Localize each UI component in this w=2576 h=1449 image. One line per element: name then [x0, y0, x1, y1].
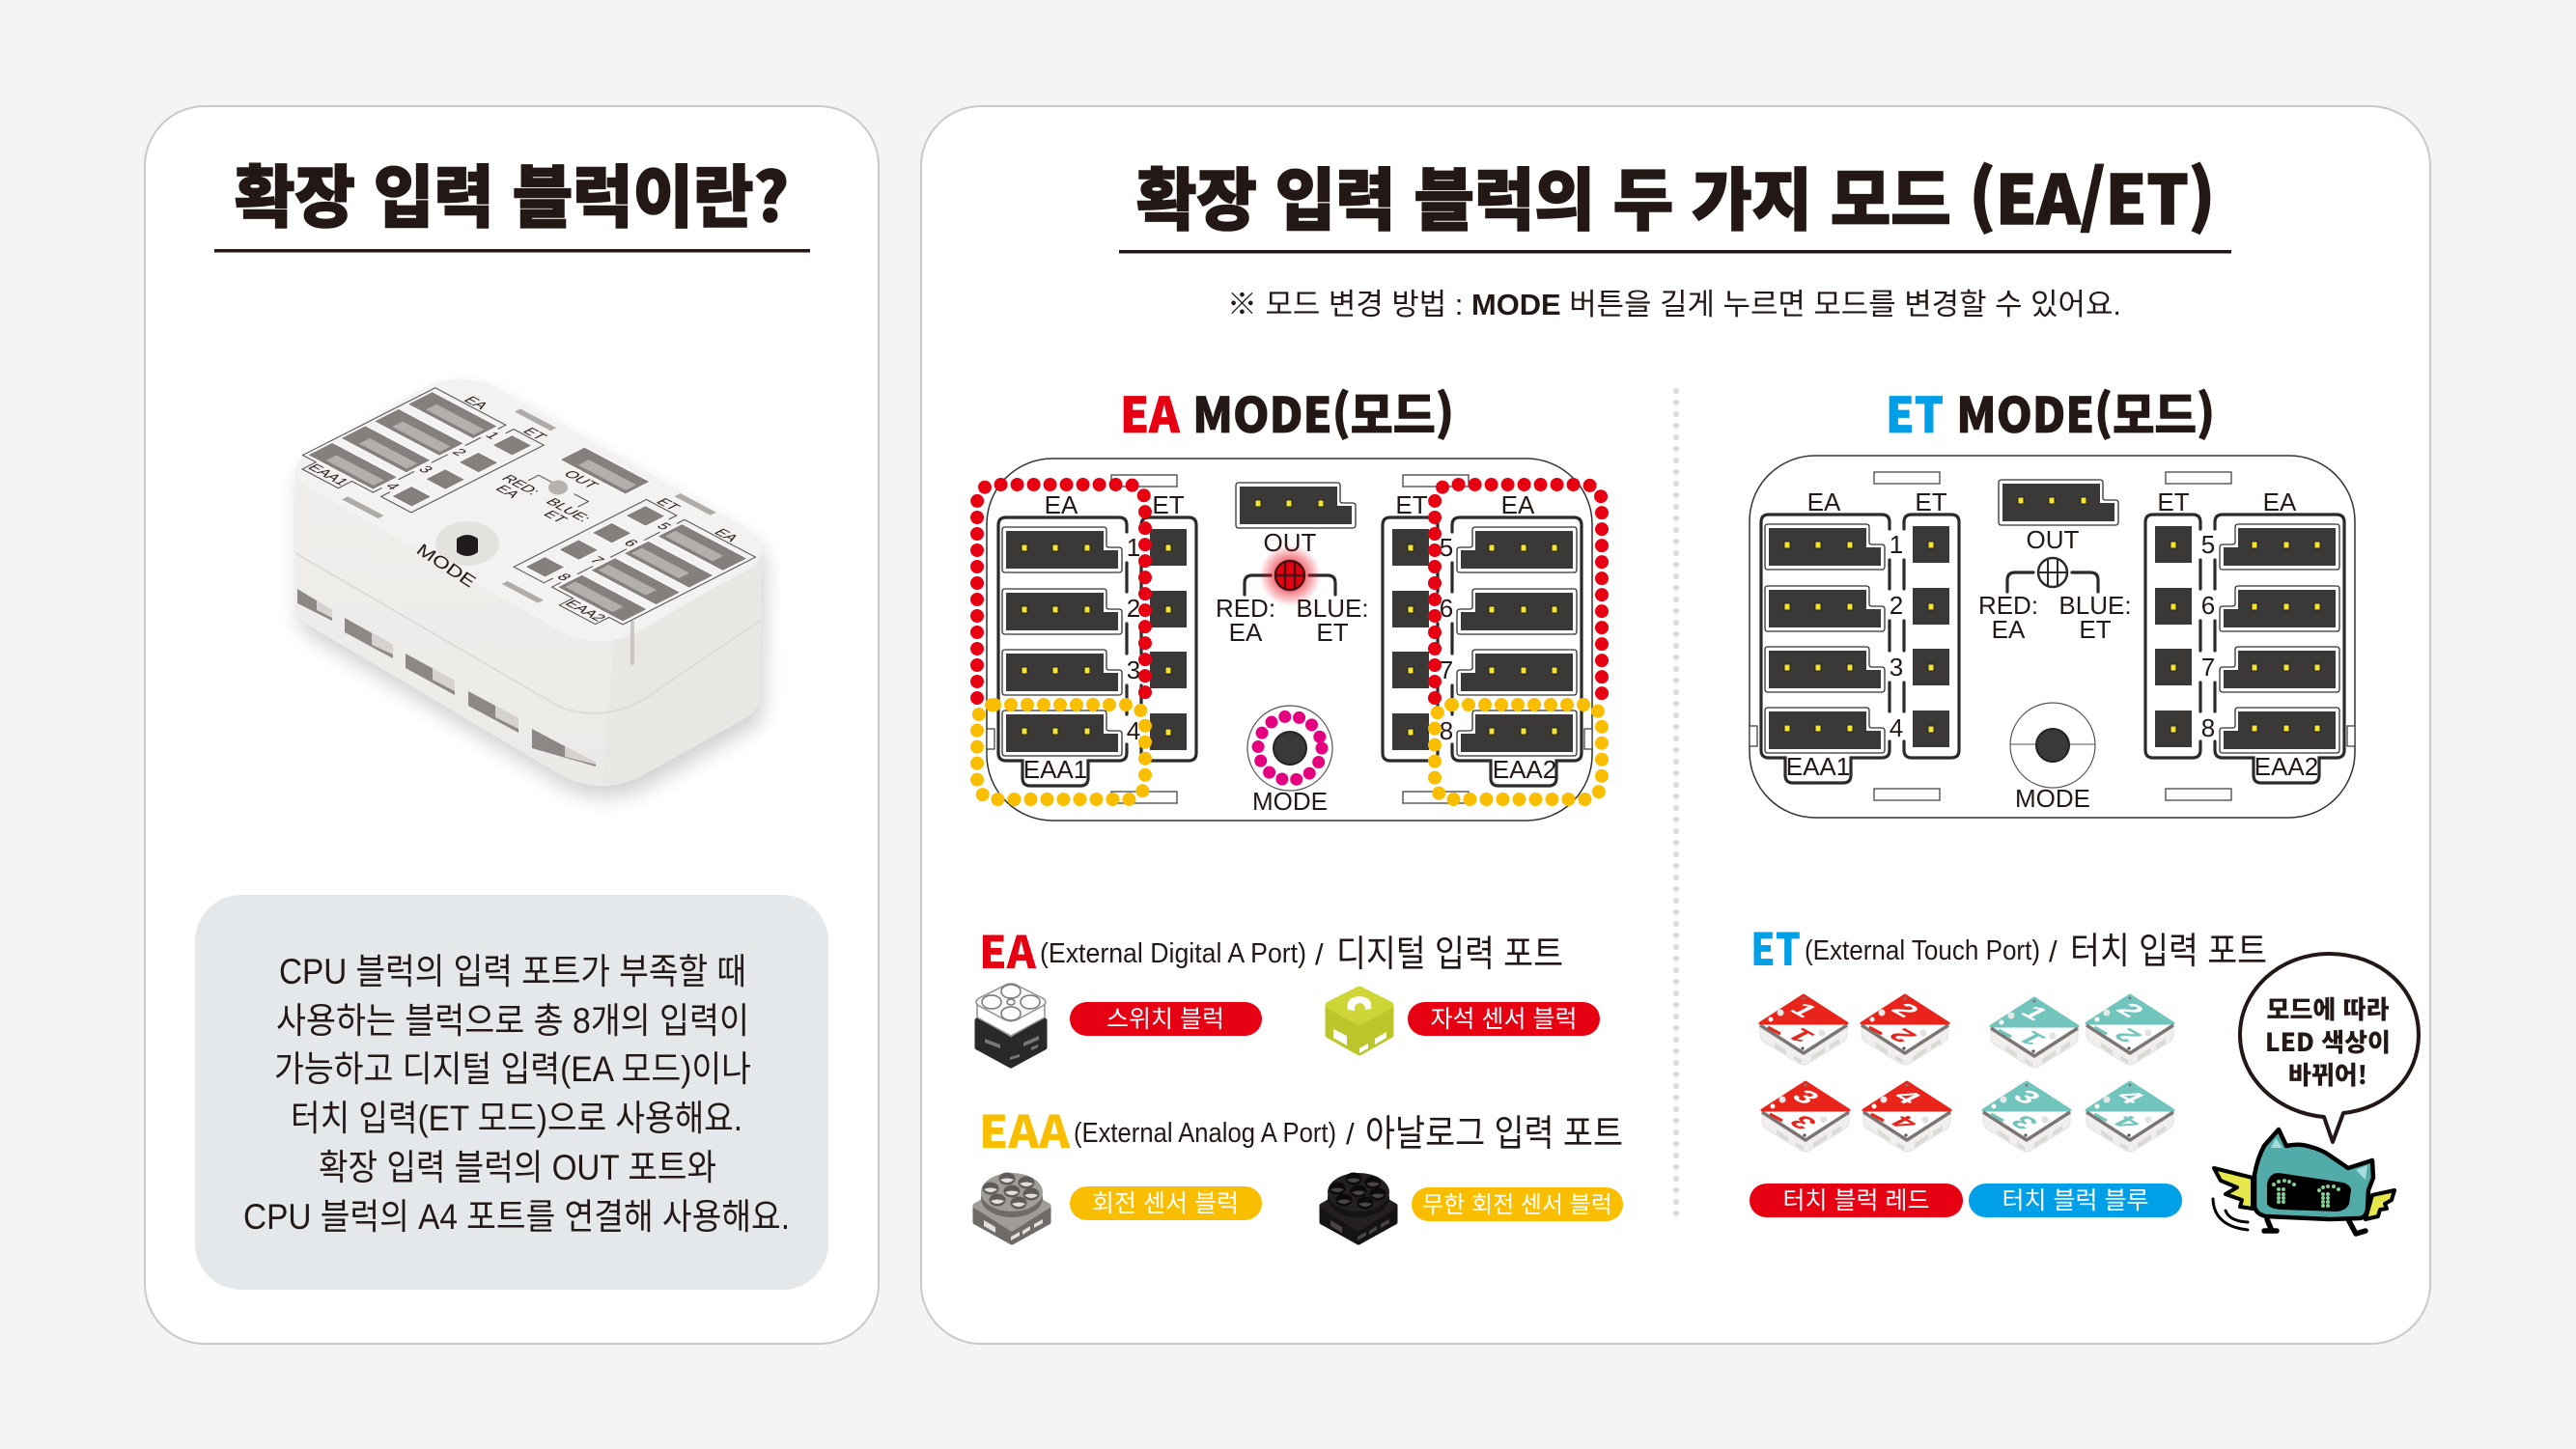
label: slash: / [2049, 934, 2058, 968]
panel: what is the extended input block [145, 106, 879, 1344]
diagram: EA mode board: EA [1501, 490, 1535, 519]
icon: blue touch block 3: 3 [2003, 1111, 2045, 1133]
diagram: ET mode board: RED: [1978, 591, 2038, 620]
diagram: ET mode board: 1 [1890, 530, 1903, 559]
pill: magnetic sensor block [1408, 1002, 1600, 1036]
label: digital input port: 디지털 입력 포트 [1336, 934, 1563, 975]
illustration: extended input block module: BLUE: [542, 496, 595, 524]
icon: red touch block 2: 2 [1885, 999, 1926, 1021]
diagram: ET mode board [1750, 456, 2355, 818]
label: slash: / [1315, 937, 1324, 971]
illustration: extended input block module: ET [518, 426, 550, 442]
icon: red touch block 4: 4 [1887, 1086, 1928, 1108]
icon: mode button with magenta dotted ring [1247, 706, 1332, 791]
description text: 터치 입력(ET 모드)으로 사용해요. [291, 1099, 742, 1138]
illustration: extended input block module [280, 376, 778, 797]
icon: red touch block 1: 1 [1780, 1024, 1822, 1046]
illustration: extended input block module: OUT [559, 468, 602, 491]
diagram: EA mode board: 4 [1127, 716, 1140, 745]
highlight: red dotted EA zones [977, 485, 1602, 698]
heading: ET mode: ET MODE(모드) [1886, 377, 2215, 447]
icon: blue touch block 3 [1983, 1082, 2070, 1152]
icon: blue touch block 4: 4 [2107, 1111, 2148, 1133]
label: analog input port: 아날로그 입력 포트 [1365, 1114, 1623, 1155]
icon: blue touch block 2: 2 [2110, 999, 2151, 1021]
label: EAA: EAA [979, 1098, 1071, 1161]
illustration: extended input block module: 4 [381, 481, 404, 492]
diagram: ET mode board: 6 [2201, 591, 2215, 620]
diagram: EA mode board: MODE [1252, 787, 1328, 816]
description text: 확장 입력 블럭의 OUT 포트와 [319, 1148, 716, 1187]
heading: EA mode: EA MODE(모드) [1120, 377, 1454, 447]
diagram: EA mode board: RED: [1216, 594, 1275, 623]
diagram: ET mode board: ET [2157, 488, 2190, 516]
diagram: ET mode board: EAA1 [1786, 752, 1850, 781]
highlight: yellow dotted EAA zones [977, 705, 1602, 799]
icon: blue touch block 3: 3 [2006, 1086, 2048, 1108]
diagram: EA mode board: EAA2 [1493, 755, 1556, 784]
illustration: extended input block module: ET [539, 509, 572, 525]
diagram: EA mode board: 6 [1440, 594, 1453, 623]
diagram: EA mode board: 8 [1440, 716, 1453, 745]
icon: blue touch block 2: 2 [2107, 1024, 2148, 1046]
diagram: EA mode board: 1 [1127, 533, 1140, 562]
diagram: ET mode board: 7 [2201, 653, 2215, 682]
pill: touch block blue [1969, 1184, 2182, 1217]
diagram: EA mode board: EA [1045, 490, 1078, 519]
icon: LED unlit [2038, 558, 2067, 587]
illustration: extended input block module: MODE [412, 541, 479, 592]
diagram: ET mode board: 5 [2201, 530, 2215, 559]
section: EA digital input port [975, 918, 1623, 1242]
diagram: EA mode board: OUT [1264, 528, 1317, 557]
pill: endless rotation sensor block: 무한 회전 센서 블럭 [1422, 1192, 1612, 1218]
pill: switch block [1070, 1002, 1262, 1036]
label: touch input port: 터치 입력 포트 [2070, 932, 2267, 972]
diagram: ET mode board: MODE [2015, 784, 2090, 813]
diagram: EA mode board: BLUE: [1296, 594, 1369, 623]
illustration: extended input block module: EA [491, 484, 524, 500]
illustration: extended input block module: 1 [481, 431, 503, 441]
diagram: EA mode board: ET [1395, 490, 1428, 519]
icon: red touch block 2: 2 [1882, 1024, 1923, 1046]
icon: red LED lit [1259, 544, 1321, 606]
description text: 사용하는 블럭으로 총 8개의 입력이 [276, 1001, 749, 1041]
diagram: EA mode board: 2 [1127, 594, 1140, 623]
note: how to change the mode: ※ 모드 변경 방법 : MODE 버튼을 길게 누르면 모드를 변경할 수 있어요. [1227, 288, 2121, 321]
illustration: extended input block module: 6 [620, 538, 641, 549]
icon: blue touch block 1: 1 [2014, 1002, 2056, 1024]
diagram: ET mode board: EAA2 [2254, 752, 2318, 781]
icon: blue touch block 1 [1991, 998, 2078, 1068]
icon: mode button [2010, 703, 2095, 788]
description text: CPU 블럭의 입력 포트가 부족할 때 [279, 952, 746, 991]
diagram: EA mode board: EAA1 [1023, 755, 1087, 784]
callout: speech bubble: 모드에 따라 [2267, 990, 2390, 1026]
icon: red touch block 1: 1 [1783, 999, 1825, 1021]
icon: blue touch block 2 [2086, 995, 2173, 1065]
icon: red touch block 2 [1862, 995, 1948, 1065]
section: ET touch input port [1750, 915, 2419, 1234]
diagram: ET mode board: 8 [2201, 713, 2215, 742]
icon: red touch block 4: 4 [1884, 1111, 1925, 1133]
diagram: ET mode board: ET [1915, 488, 1947, 516]
illustration: extended input block module: 3 [414, 464, 436, 475]
illustration: extended input block module: EAA2 [561, 599, 609, 624]
label: EAA full name: (External Analog A Port) [1074, 1118, 1336, 1149]
icon: red touch block 4 [1863, 1082, 1950, 1152]
diagram: EA mode board: 5 [1440, 533, 1453, 562]
diagram: ET mode board: 4 [1890, 713, 1903, 742]
diagram: ET mode board: EA [1992, 615, 2026, 644]
icon: red touch block 1 [1760, 995, 1847, 1065]
label: slash: / [1346, 1117, 1355, 1151]
pill: endless rotation sensor block [1412, 1187, 1623, 1221]
heading: left panel title: 확장 입력 블럭이란? [235, 144, 789, 241]
description text [243, 952, 790, 1237]
description text: 가능하고 디지털 입력(EA 모드)이나 [274, 1049, 751, 1089]
icon: endless rotation sensor block [1322, 1172, 1395, 1242]
icon: blue touch block 4: 4 [2110, 1086, 2151, 1108]
diagram: ET mode board: EA [2263, 488, 2297, 516]
icon: rotation sensor block [975, 1172, 1049, 1242]
pill: rotation sensor block [1070, 1186, 1262, 1220]
panel: two modes of the extended input block [921, 106, 2430, 1344]
callout: speech bubble: 바뀌어! [2288, 1056, 2367, 1092]
description box [195, 895, 828, 1290]
pill: touch block red: 터치 블럭 레드 [1783, 1187, 1929, 1214]
illustration: extended input block module: EA [460, 395, 492, 411]
diagram: ET mode board: 2 [1890, 591, 1903, 620]
diagram: EA mode board [977, 459, 1602, 821]
label: ET: ET [1750, 915, 1801, 979]
diagram: EA mode board: ET [1316, 618, 1349, 647]
diagram: EA mode board: 3 [1127, 655, 1140, 684]
pill: magnetic sensor block: 자석 센서 블럭 [1431, 1006, 1577, 1033]
illustration: extended input block module: 7 [586, 555, 607, 566]
callout: speech bubble [2240, 954, 2419, 1142]
icon: switch block [976, 984, 1046, 1066]
pill: touch block blue: 터치 블럭 블루 [2002, 1187, 2148, 1214]
diagram: EA mode board: ET [1152, 490, 1185, 519]
illustration: extended input block module: ET [652, 496, 684, 513]
diagram: EA mode board: 7 [1440, 655, 1453, 684]
diagram: ET mode board: ET [2079, 615, 2112, 644]
label: EA: EA [979, 918, 1037, 982]
diagram: ET mode board: EA [1807, 488, 1841, 516]
illustration: extended input block module: 8 [552, 571, 574, 583]
illustration: extended input block module: 2 [448, 447, 470, 459]
icon: magnetic sensor block [1329, 989, 1390, 1053]
description text: CPU 블럭의 A4 포트를 연결해 사용해요. [243, 1197, 790, 1237]
illustration: extended input block module: EAA1 [303, 462, 352, 488]
illustration: extended input block module: EA [710, 527, 742, 544]
icon: red touch block 3: 3 [1782, 1111, 1824, 1133]
diagram: ET mode board: BLUE: [2058, 591, 2132, 620]
label: EA full name: (External Digital A Port) [1040, 938, 1306, 969]
pill: touch block red [1750, 1184, 1963, 1217]
illustration: mascot character [2213, 1129, 2394, 1234]
label: ET full name: (External Touch Port) [1805, 935, 2040, 966]
pill: rotation sensor block: 회전 센서 블럭 [1092, 1190, 1239, 1217]
diagram: ET mode board: 3 [1890, 653, 1903, 682]
illustration: extended input block module: RED: [497, 473, 544, 497]
illustration: extended input block module: 5 [653, 520, 675, 532]
icon: red touch block 3: 3 [1785, 1086, 1827, 1108]
icon: blue touch block 1: 1 [2011, 1027, 2053, 1049]
icon: red touch block 3 [1762, 1082, 1849, 1152]
heading: right panel title: 확장 입력 블럭의 두 가지 모드 (EA/ET) [1136, 147, 2215, 244]
diagram: EA mode board: EA [1229, 618, 1263, 647]
icon: blue touch block 4 [2086, 1082, 2173, 1152]
diagram: ET mode board: OUT [2027, 525, 2080, 554]
callout: speech bubble: LED 색상이 [2265, 1023, 2391, 1059]
pill: switch block: 스위치 블럭 [1106, 1006, 1224, 1033]
